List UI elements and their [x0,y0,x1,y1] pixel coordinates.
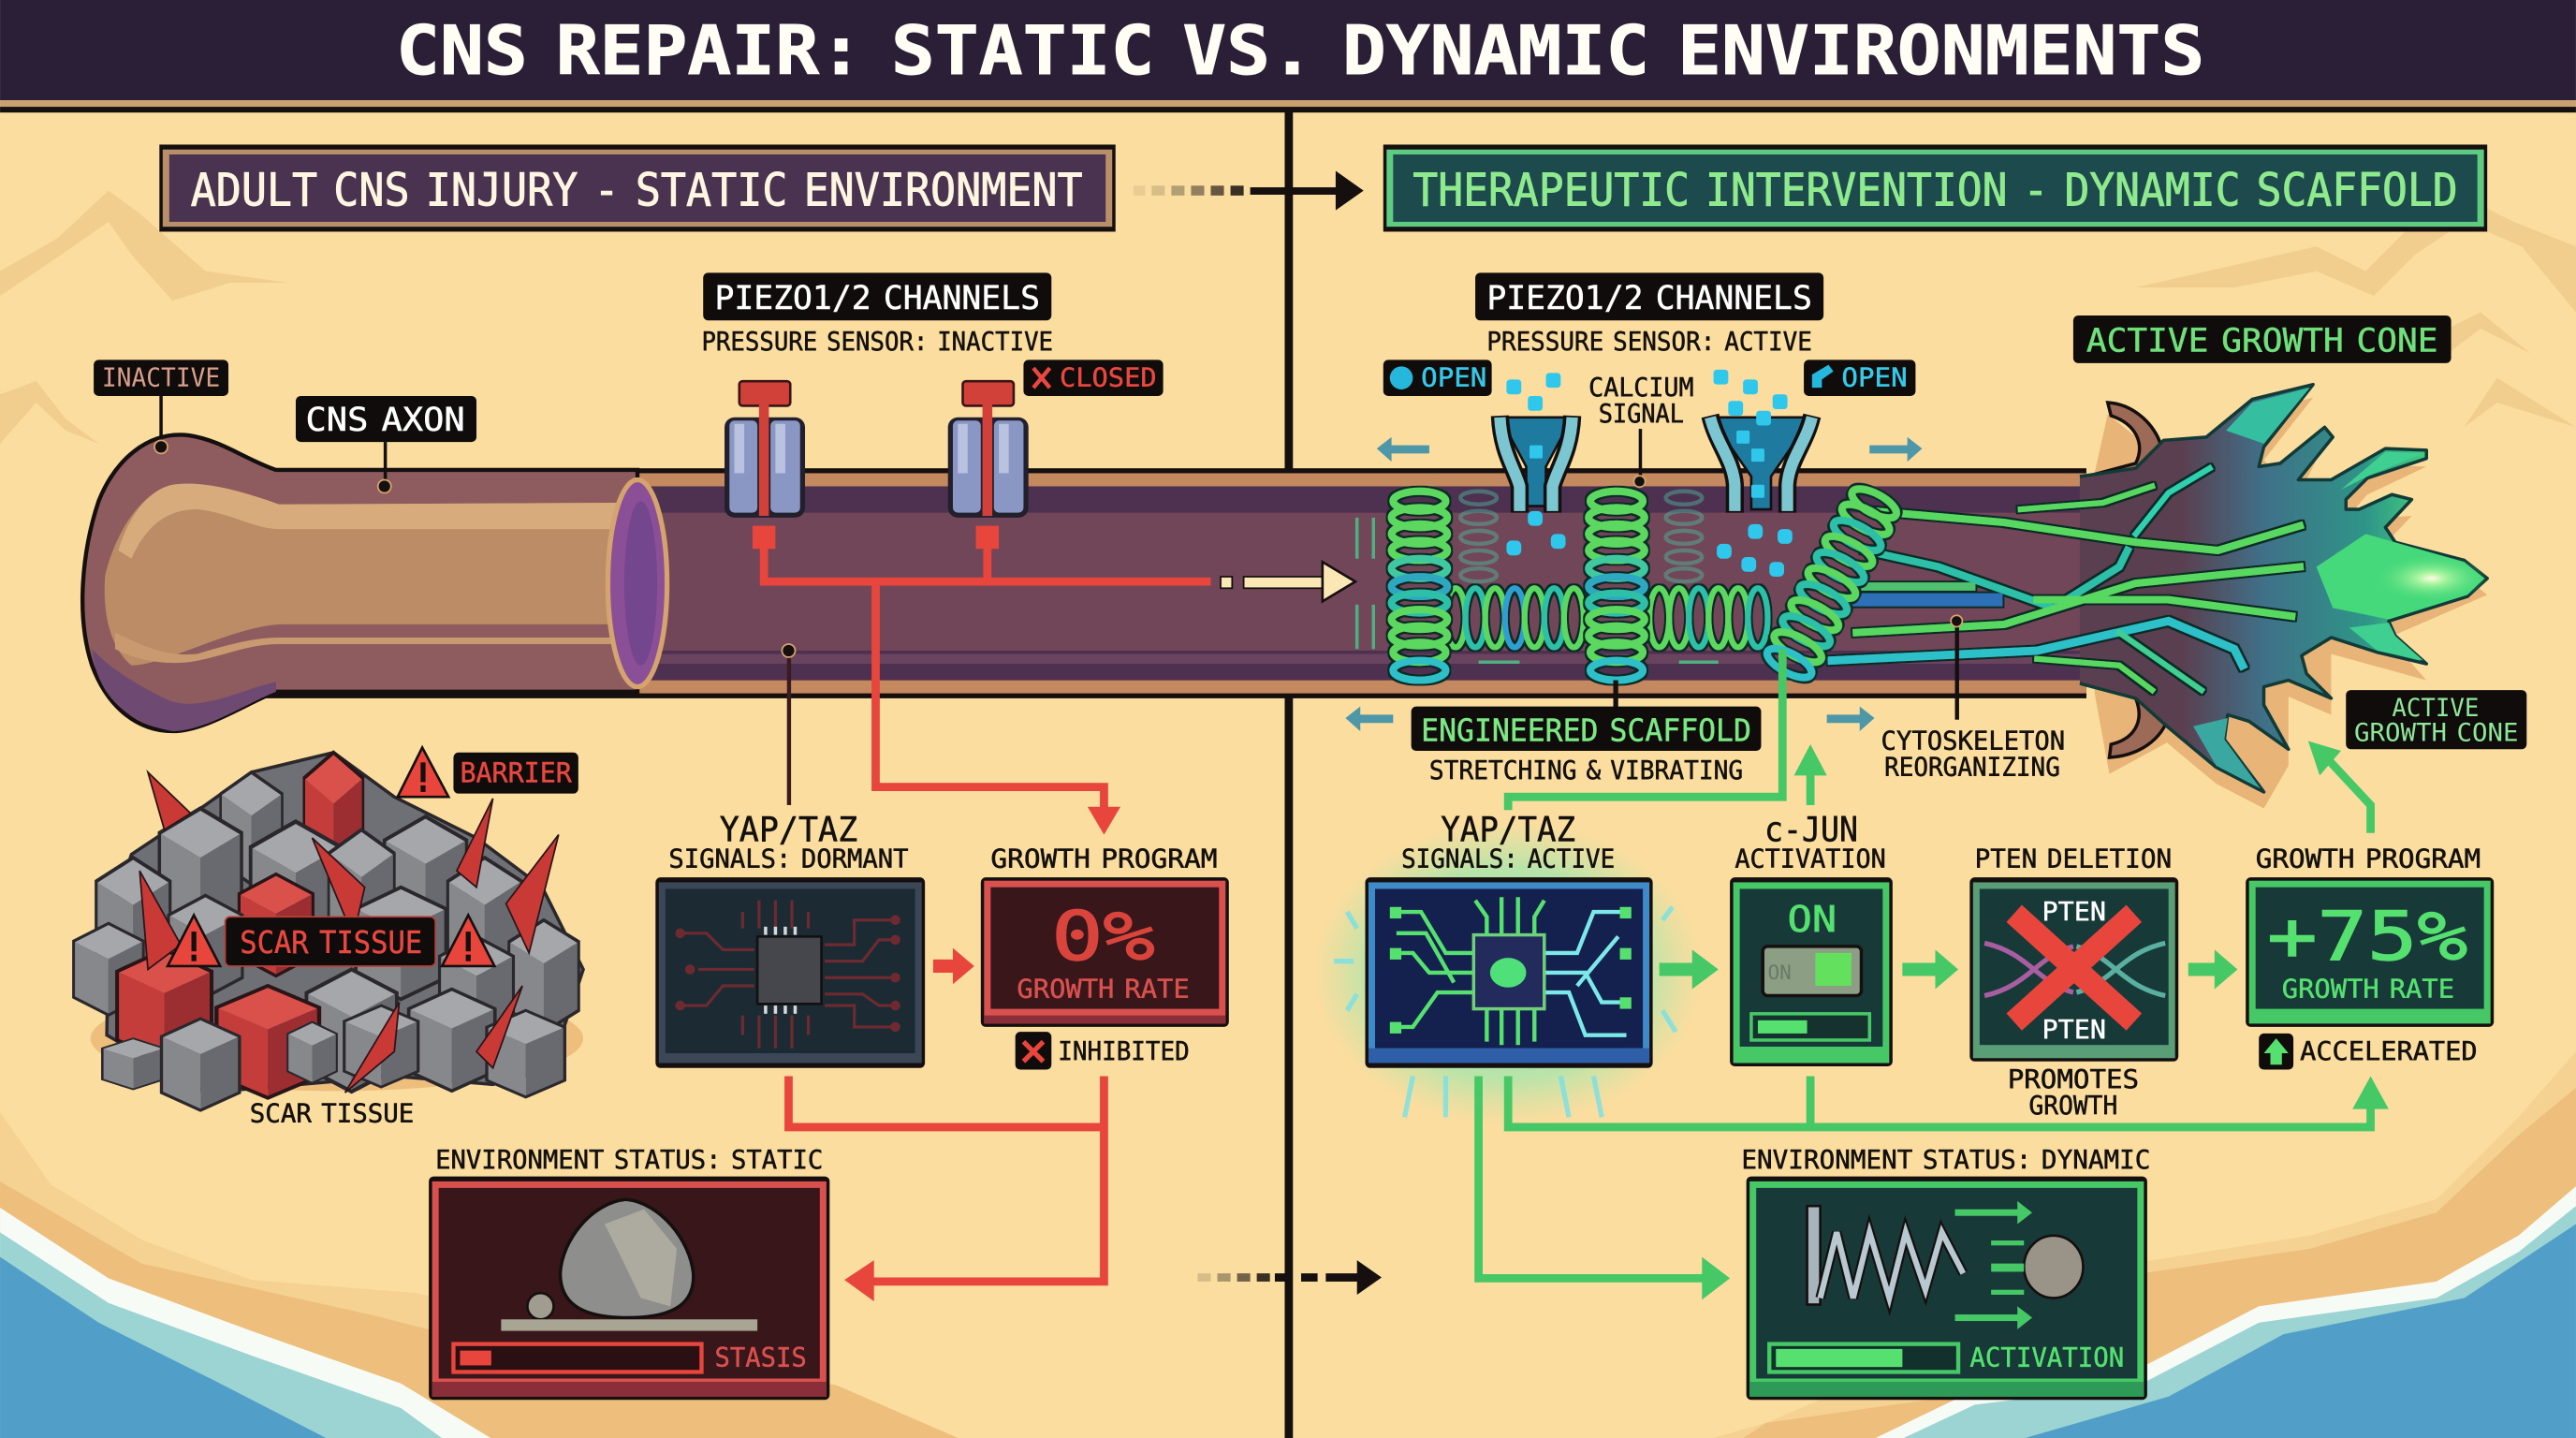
arrow: chip to dynamic panel [1479,1077,1730,1299]
text: YAP/TAZ static: YAP/TAZ [720,810,857,850]
label: active growth cone top: ACTIVE GROWTH CONE [2086,322,2438,360]
ghost coils [1460,492,1702,581]
label: piezo static: PIEZO1/2 CHANNELS [714,279,1040,317]
text: growth program dynamic: GROWTH PROGRAM [2256,845,2481,874]
text: growth program static: GROWTH PROGRAM [990,845,1218,874]
banner: adult CNS injury [159,144,1116,231]
label: accelerated: ACCELERATED [2300,1037,2478,1066]
panel: activation [1747,1177,2147,1400]
label: inactive: INACTIVE [102,363,220,392]
label: scar tissue tag: SCAR TISSUE [240,924,422,961]
motion arrows [1345,437,1922,731]
activation progress [1769,1344,1958,1372]
icon: chip glow [1314,822,1702,1123]
label: open right [1804,360,1915,396]
connector: cytoskeleton [1951,615,1962,720]
label: open left: OPEN [1421,363,1486,392]
engineered scaffold: horizontal coil [1445,588,1767,647]
text: YAP/TAZ dynamic: YAP/TAZ [1441,810,1575,850]
center divider [1284,111,1293,1438]
arrow: growth program to cone [2308,741,2371,833]
text: activation: ACTIVATION [1734,845,1886,874]
arrow: red signal line with branch [753,526,1355,835]
text: scar tissue caption: SCAR TISSUE [250,1100,414,1129]
panel: dormant chip [655,877,925,1068]
label: barrier: BARRIER [460,756,572,788]
calcium ions [1506,370,1793,577]
label: inactive [94,360,228,453]
motion arrows [1955,1201,2032,1329]
panel: growth rate 0% [981,877,1229,1027]
panel: growth rate 0%: GROWTH RATE [1017,975,1190,1004]
dunes right [2136,198,2576,427]
scar spikes [139,772,559,1093]
text: pressure sensor active: PRESSURE SENSOR: ACTIVE [1486,328,1812,357]
panel: activation: ACTIVATION [1969,1343,2124,1373]
text: cytoskeleton reorganizing: CYTOSKELETON [1881,726,2065,756]
label: piezo dynamic: PIEZO1/2 CHANNELS [1486,279,1812,317]
axon tube [82,435,2086,731]
text: stretching and vibrating: STRETCHING & VIBRATING [1429,756,1743,785]
banner: adult CNS injury: ADULT CNS INJURY - STATIC ENVIRONMENT [191,164,1083,216]
label: CNS axon [296,396,476,493]
panel: stasis: STASIS [714,1343,807,1373]
label: active growth cone lower: ACTIVE [2392,695,2479,723]
arrow: chip to scaffold [1508,649,1782,810]
axon bulb [82,435,637,731]
text: c-Jun: c-JUN [1764,810,1858,850]
panel: stasis [429,1177,829,1400]
dunes left [0,191,402,592]
panel: c-Jun on: ON [1788,899,1837,941]
label: open left [1383,360,1492,396]
title bar [0,0,2576,112]
arrow: chip to growth static [933,948,974,984]
icon: closed channel 2 [948,381,1029,518]
label: scar tissue tag [168,916,494,966]
icon: boulder [561,1199,694,1318]
text: PTEN deletion: PTEN DELETION [1975,845,2172,874]
text: pressure sensor inactive: PRESSURE SENSOR: INACTIVE [701,328,1053,357]
cytoskeleton filaments [1832,468,2300,690]
label: active growth cone lower: GROWTH CONE [2354,720,2519,748]
engineered scaffold: vertical coil 2 [1588,492,1645,681]
text: calcium signal: SIGNAL [1599,400,1684,429]
text: calcium signal [1588,374,1693,487]
arrow: chip to c-Jun [1660,949,1719,990]
label: open right: OPEN [1841,363,1908,392]
label: barrier [398,748,578,797]
axon cut face [607,479,667,687]
label: inhibited: INHIBITED [1058,1037,1190,1066]
text: promotes growth: GROWTH [2029,1092,2117,1121]
label: closed: CLOSED [1060,363,1157,392]
panel: PTEN deletion [1969,877,2178,1062]
text: cytoskeleton reorganizing [1881,726,2065,782]
icon: compressed spring [1808,1206,1821,1304]
panel: growth rate +75%: +75% [2267,897,2467,976]
arrows: green to growth program [1508,1077,2389,1127]
connector: axon to YAP/TAZ [782,644,795,805]
arrow: banner transition [1134,171,1364,211]
panel: PTEN deletion: PTEN [2042,898,2106,927]
label: active growth cone lower [2346,690,2526,749]
panel: PTEN deletion: PTEN [2042,1016,2106,1045]
label: closed [1023,360,1164,396]
label: inhibited [1016,1032,1190,1070]
panel: c-Jun on: ON [1767,961,1792,984]
stasis progress [453,1344,701,1372]
right shore [1708,1051,2576,1438]
chip rays [1334,907,1682,1117]
text: promotes growth [2008,1065,2139,1121]
arrow: bottom transition [1197,1260,1382,1295]
text: cytoskeleton reorganizing: REORGANIZING [1884,753,2060,782]
panel: growth rate +75% [2246,877,2494,1027]
arrow: PTEN to growth [2188,949,2237,990]
label: accelerated [2259,1034,2478,1070]
arrow: c-Jun up [1794,744,1827,805]
title: CNS REPAIR: STATIC VS. DYNAMIC ENVIRONMENTS [396,11,2204,90]
engineered scaffold: tilted coil [1762,482,1902,684]
left shore [0,1112,961,1438]
text: calcium signal: CALCIUM [1588,374,1693,403]
text: environment dynamic: ENVIRONMENT STATUS: DYNAMIC [1741,1146,2150,1175]
label: engineered scaffold [1412,681,1761,751]
text: promotes growth: PROMOTES [2008,1065,2139,1094]
growth cone shadow [2095,398,2487,808]
arrow: c-Jun to PTEN [1902,949,1958,990]
text: signals dormant: SIGNALS: DORMANT [668,845,909,874]
arrows: red to stasis [788,1077,1104,1301]
text: signals active: SIGNALS: ACTIVE [1401,845,1615,874]
panel: growth rate +75%: GROWTH RATE [2282,975,2454,1004]
panel: c-Jun on [1730,877,1893,1066]
scar tissue cluster [74,753,583,1110]
banner: therapeutic intervention [1383,144,2487,231]
icon: open channel 1 [1500,416,1573,513]
panel: growth rate 0%: 0% [1051,897,1155,976]
panel: active chip [1365,877,1653,1068]
icon: open channel 2 [1710,416,1812,513]
label: CNS axon: CNS AXON [305,401,465,439]
growth cone [1832,385,2487,792]
banner: therapeutic intervention: THERAPEUTIC INTERVENTION - DYNAMIC SCAFFOLD [1412,164,2458,216]
icon: closed channel 1 [724,381,805,518]
label: engineered scaffold: ENGINEERED SCAFFOLD [1421,712,1751,749]
engineered scaffold: vertical coil 1 [1392,492,1447,681]
text: environment static: ENVIRONMENT STATUS: STATIC [435,1146,823,1175]
